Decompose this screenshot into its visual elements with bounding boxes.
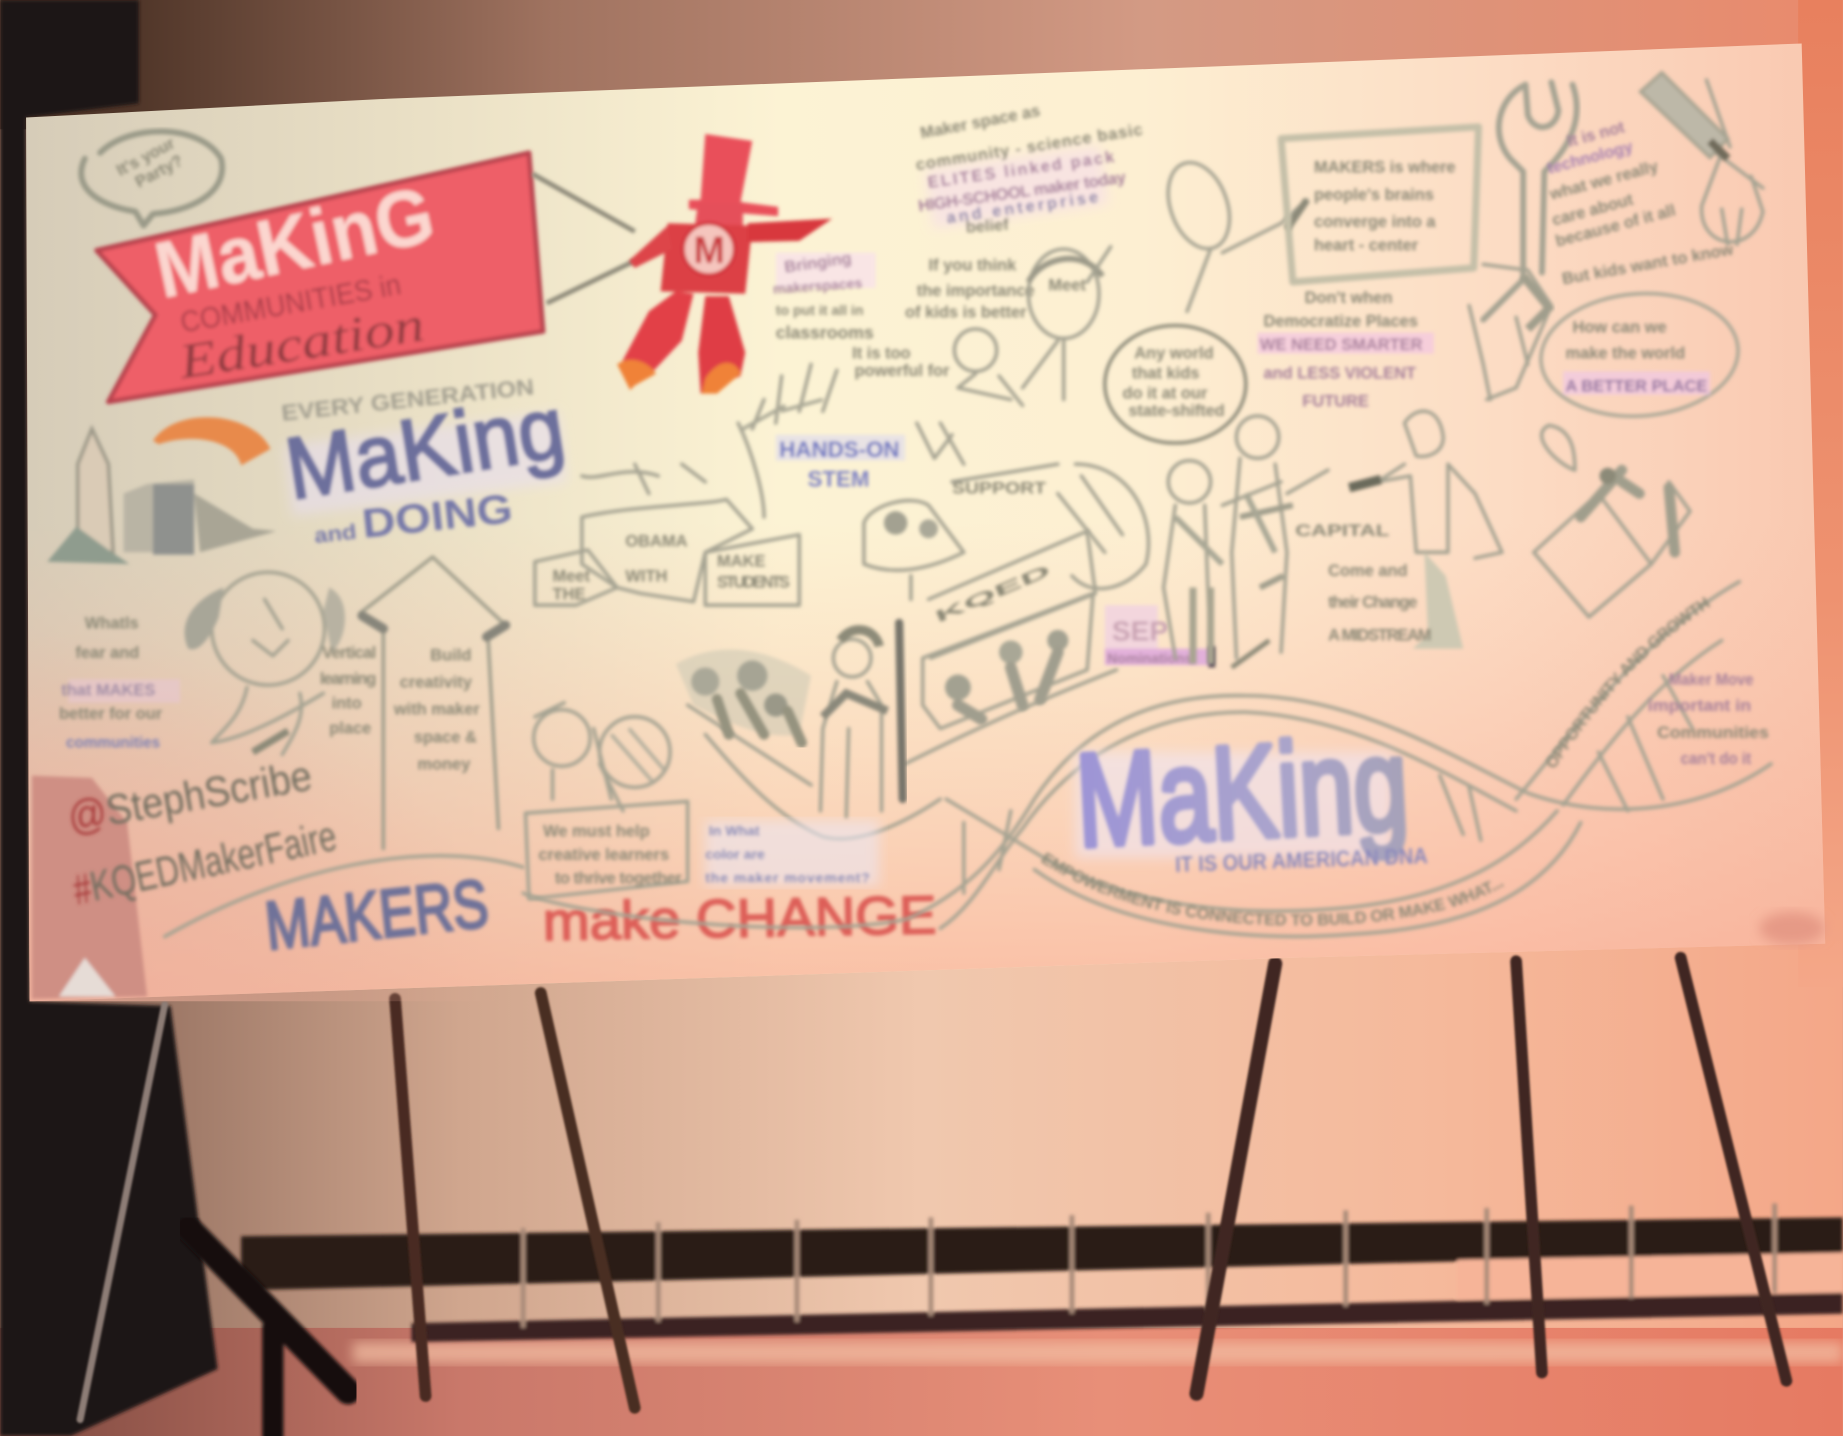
- text block: top centre quote: belief: [965, 216, 1010, 237]
- text block: left question: that MAKES: [61, 682, 155, 700]
- illustration: house-shaped arrow with text: creativity: [400, 673, 473, 691]
- illustration: girl with pigtails: into: [332, 695, 362, 713]
- illustration: USA map with speech boxes: STUDENTS: [717, 574, 790, 592]
- label: Make Change: make CHANGE: [542, 885, 937, 952]
- text block: Sometimes come and check: [1295, 522, 1432, 644]
- illustration: Washington monument and city: [47, 417, 276, 564]
- label: hands-on STEM: STEM: [808, 467, 869, 492]
- text block: smarter future: FUTURE: [1302, 393, 1369, 411]
- connector lines: banner to robot: [533, 174, 635, 303]
- text block: kids quote: [852, 256, 1035, 380]
- text block: left question: better for our: [59, 705, 163, 723]
- framed board with text: people's brains: [1314, 186, 1434, 204]
- text block: who's the maker community: the maker movement?: [705, 870, 870, 886]
- text block: kids quote: the importance: [917, 282, 1035, 300]
- text block: smarter future: [1258, 289, 1434, 411]
- text along DNA: right strand: OPPORTUNITY AND GROWTH: [1545, 596, 1712, 770]
- text along DNA: lower strand: EMPOWERMENT IS CONNECTED TO BUILD OR MAKE WHAT...: [1040, 851, 1505, 928]
- text block: it is not technology: care about: [1550, 190, 1636, 229]
- text block: top centre quote: ELITES linked pack: [927, 148, 1116, 192]
- paper board: [26, 43, 1825, 1001]
- text block: kids quote: of kids is better: [905, 303, 1027, 321]
- torn corner patch: [32, 776, 147, 999]
- illustration: classroom sign: KQED: [932, 562, 1053, 626]
- illustration: house-shaped arrow with text: space &: [414, 729, 477, 747]
- speech bubble: top left: Party?: [132, 152, 186, 192]
- label: Makers: MAKERS: [262, 865, 492, 964]
- illustration: house-shaped arrow with text: with maker: [393, 700, 480, 718]
- illustration: DNA ribbon road: [165, 582, 1771, 937]
- label: hands-on STEM: HANDS-ON: [779, 437, 900, 462]
- heading: Making: MaKing: [279, 379, 571, 518]
- speech bubble: better place: But kids want to know: [1561, 240, 1735, 288]
- text block: bringing makerspaces: makerspaces: [773, 275, 863, 297]
- illustration: house-shaped arrow with text: money: [417, 756, 471, 774]
- illustration: girl with pigtails: Vertical: [322, 644, 376, 662]
- caption: it is in our American DNA: IT IS OUR AMERICAN DNA: [1175, 843, 1428, 877]
- speech bubble: any world: Any world: [1134, 344, 1214, 362]
- speech bubble: top left: It's your: [113, 134, 178, 180]
- label: hands-on STEM: [776, 435, 905, 492]
- illustration: maker kids box: [525, 703, 688, 899]
- text block: kids quote: It is too: [852, 344, 911, 362]
- text block: it is not technology: It is not: [1565, 118, 1627, 151]
- heading: Making is in our American DNA: [1073, 710, 1428, 877]
- text: pink sticker with marker: [1105, 605, 1215, 667]
- illustration: USA map with speech boxes: MAKE: [717, 552, 765, 570]
- text block: bringing makerspaces: classrooms: [776, 322, 874, 342]
- heading: Making: MaKing: [1073, 710, 1411, 874]
- illustration: crowd of makers: [676, 649, 811, 743]
- illustration: hand holding wrench: [1469, 264, 1551, 400]
- text block: left question: [59, 615, 180, 751]
- icon: red maker robot: [617, 134, 832, 394]
- caption: every generation: EVERY GENERATION: [280, 374, 535, 426]
- speech bubble: top left: [81, 131, 222, 226]
- text block: DNA right: Maker Move: [1669, 671, 1753, 689]
- stage floor: [0, 1328, 1843, 1436]
- illustration: person holding a staff: [820, 623, 903, 817]
- text block: smarter future: Democratize Places: [1263, 313, 1418, 331]
- sub-heading: Community in: COMMUNITIES in: [178, 268, 403, 339]
- illustration: raised hands: [738, 364, 837, 517]
- title banner: Making Community in Education: [97, 153, 543, 402]
- text block: bringing makerspaces: to put it all in: [776, 302, 863, 318]
- icon: red maker robot: M: [694, 229, 725, 271]
- speech bubble: any world: that kids: [1132, 364, 1199, 382]
- illustration: maker kids box: We must help: [543, 823, 650, 841]
- text block: it is not technology: [1545, 118, 1677, 251]
- speech bubble: better place: A BETTER PLACE: [1565, 377, 1707, 395]
- framed board with text: [1281, 127, 1479, 282]
- text block: bringing makerspaces: Bringing: [783, 249, 853, 277]
- text block: top centre quote: [915, 102, 1144, 237]
- text block: it is not technology: technology: [1545, 137, 1636, 178]
- text block: left question: communities: [66, 734, 160, 751]
- speech bubble: any world: state-shifted: [1128, 402, 1225, 420]
- illustration: workshop audience sketch: SUPPORT: [952, 480, 1046, 498]
- illustration: USA map with speech boxes: OBAMA: [625, 532, 688, 550]
- speech bubble: better place: How can we: [1573, 319, 1667, 337]
- text block: it is not technology: what we really: [1547, 157, 1661, 204]
- illustration: figures with tools: [1164, 416, 1328, 667]
- text: pink sticker with marker: SEP: [1112, 614, 1168, 646]
- text block: left question: Whatls: [85, 615, 139, 633]
- illustration: maker kids box: creative learners: [538, 846, 669, 864]
- text block: smarter future: WE NEED SMARTER: [1260, 336, 1423, 354]
- framed board with text: converge into a: [1314, 213, 1436, 231]
- easel legs: [80, 958, 1786, 1420]
- framed board with text: MAKERS is where: [1314, 159, 1456, 177]
- text block: top centre quote: community - science basic: [915, 121, 1144, 174]
- illustration: boy and adult figure: Meet: [1048, 276, 1086, 294]
- text block: DNA right: [1648, 671, 1769, 768]
- text block: kids quote: If you think: [929, 256, 1017, 274]
- illustration: USA map with speech boxes: Meet: [553, 568, 590, 586]
- text block: DNA right: important in: [1648, 697, 1751, 715]
- illustration: presenter with beard pointing: [1157, 154, 1307, 311]
- speech bubble: any world: do it at our: [1122, 384, 1208, 402]
- text block: Sometimes come and check: A MIDSTREAM: [1328, 626, 1432, 644]
- text: pink sticker with marker: Nominations: [1107, 650, 1193, 666]
- text block: left question: fear and: [75, 644, 139, 662]
- illustration: house-shaped arrow with text: [360, 557, 506, 848]
- icon: wrench: [1483, 82, 1577, 320]
- illustration: workshop audience sketch: [864, 423, 1149, 599]
- illustration: girl with pigtails: place: [329, 719, 371, 737]
- credit: KQED Maker Faire hashtag: #KQEDMakerFaire: [69, 812, 341, 914]
- illustration: maker kids box: to thrive together: [555, 870, 682, 888]
- illustration: tall person in lab coat: [1349, 411, 1502, 649]
- icon: orange swoosh arrow: [153, 417, 270, 465]
- text block: smarter future: Don't when: [1305, 289, 1393, 307]
- illustration: girl with pigtails: [185, 572, 376, 754]
- text block: who's the maker community: color are: [705, 846, 765, 862]
- heading: and Doing: and DOING: [311, 485, 515, 552]
- text block: top centre quote: and enterprise: [945, 188, 1099, 227]
- text block: who's the maker community: In What: [709, 823, 760, 839]
- text block: DNA right: can't do it: [1681, 750, 1752, 768]
- illustration: classroom sign: [923, 531, 1095, 729]
- speech bubble: any world: [1105, 326, 1246, 443]
- text block: who's the maker community: [705, 820, 879, 886]
- speech bubble: better place: make the world: [1565, 344, 1685, 362]
- text block: top centre quote: HIGH-SCHOOL maker today: [917, 168, 1128, 215]
- text block: it is not technology: because of it all: [1554, 201, 1677, 251]
- illustration: house-shaped arrow with text: Build: [430, 646, 471, 664]
- credit: StephScribe handle: @StephScribe: [64, 752, 315, 841]
- microphone stand: [188, 1228, 348, 1436]
- illustration: open box with tools: [1534, 425, 1690, 617]
- back rail with hooks: [241, 1203, 1843, 1342]
- sub-heading: Education: Education: [174, 296, 428, 389]
- framed board with text: heart - center: [1314, 236, 1419, 254]
- text block: bringing makerspaces: [773, 249, 876, 342]
- text block: Sometimes come and check: CAPITAL: [1295, 522, 1389, 540]
- heading: Making: MaKinG: [147, 169, 442, 315]
- heading block: Making and Doing: [279, 374, 571, 552]
- text block: DNA right: Communities: [1657, 724, 1769, 742]
- text block: Sometimes come and check: Come and: [1328, 562, 1408, 580]
- text: scribe credits: [64, 752, 341, 914]
- illustration: USA map with speech boxes: WITH: [625, 568, 667, 586]
- text block: Sometimes come and check: their Change: [1328, 594, 1417, 612]
- left black curtain: [0, 0, 218, 1436]
- illustration: boy and adult figure: [954, 247, 1111, 405]
- icon: screwdriver and pliers: [1641, 73, 1763, 244]
- illustration: USA map with speech boxes: THE: [553, 585, 585, 603]
- illustration: girl with pigtails: learning: [320, 670, 376, 688]
- text block: kids quote: powerful for: [855, 362, 950, 380]
- illustration: USA map with speech boxes: [535, 464, 799, 605]
- speech bubble: better place: [1537, 240, 1742, 423]
- text block: top centre quote: Maker space as: [919, 102, 1042, 143]
- text block: smarter future: and LESS VIOLENT: [1263, 364, 1416, 382]
